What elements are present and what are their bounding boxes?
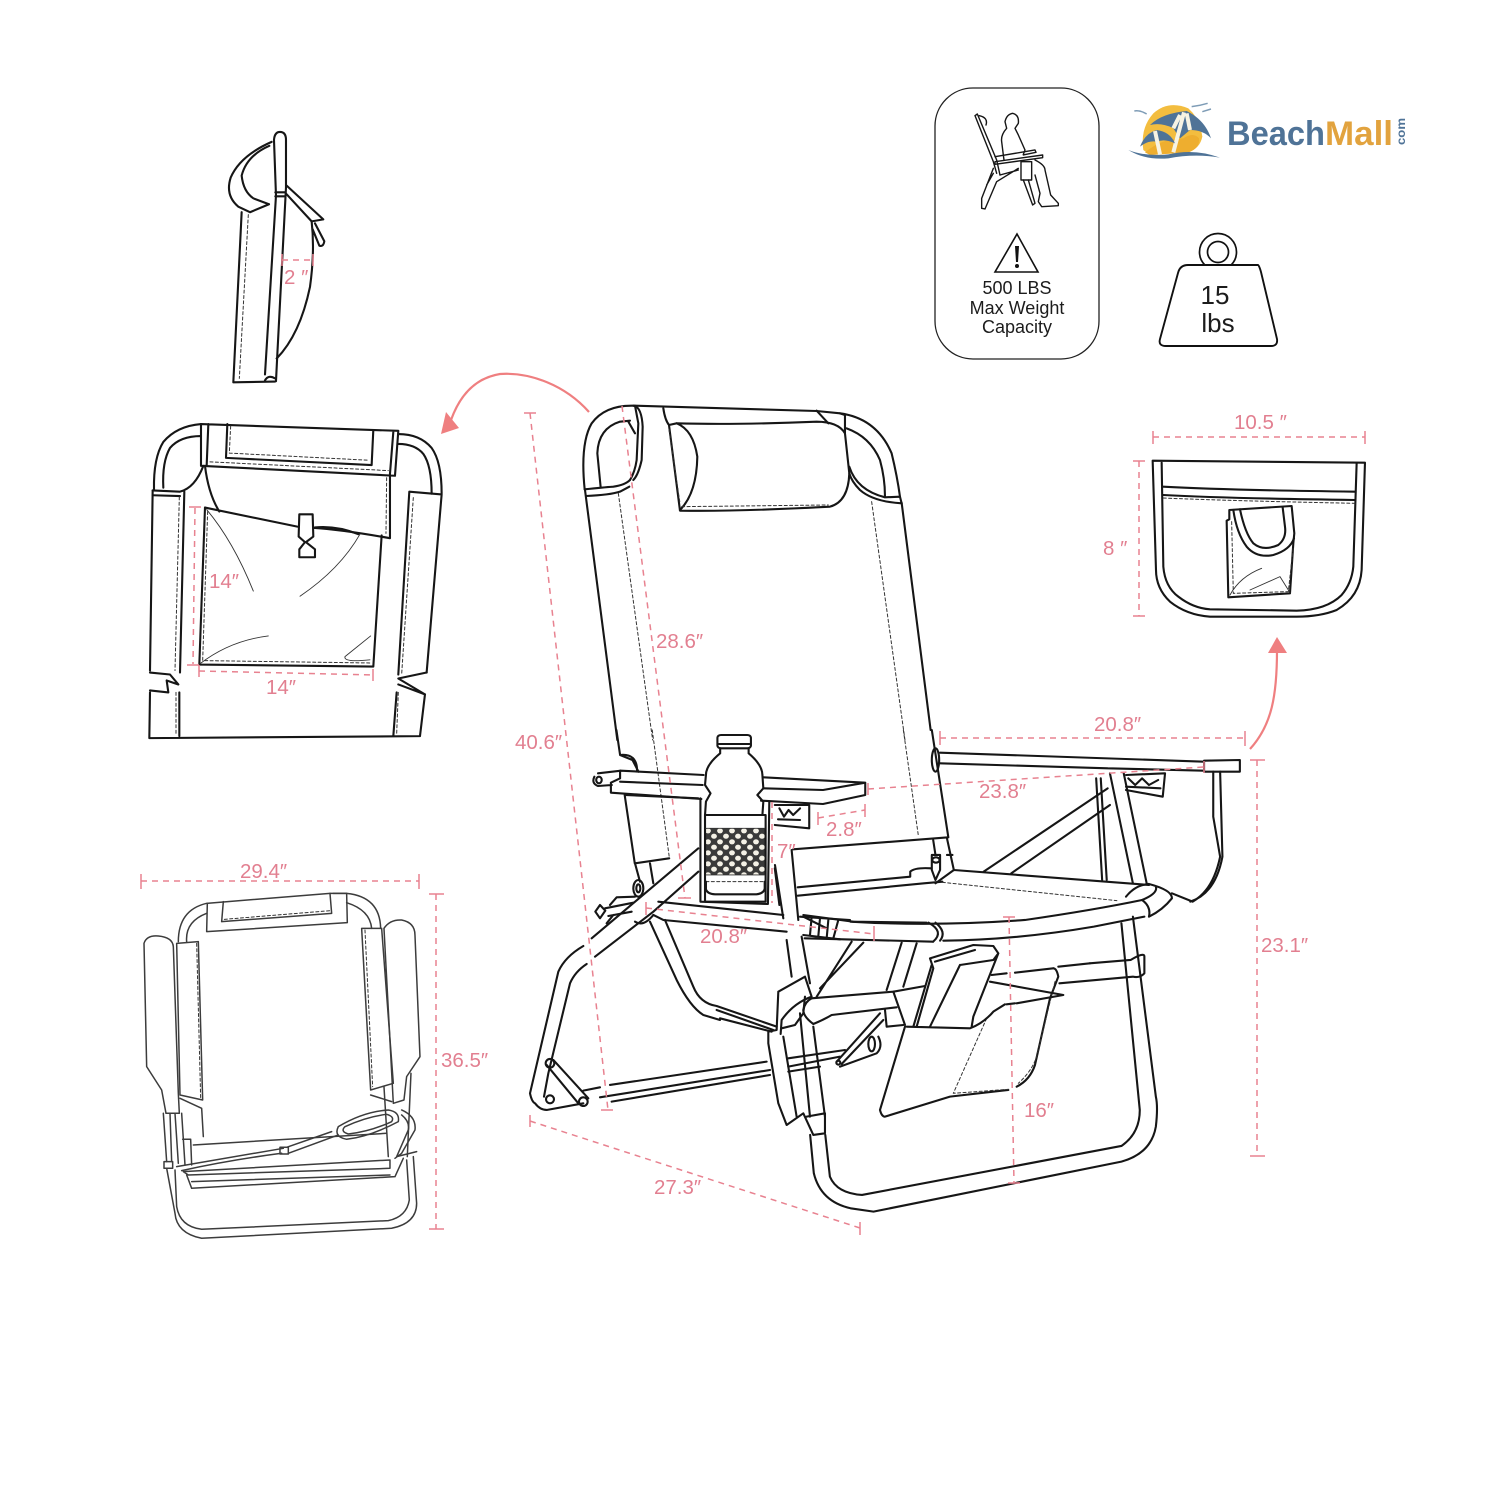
dimension 28.6 back height: 28.6″ [656,630,703,653]
arrow to side pocket view [1250,637,1287,749]
panel: max weight capacity: Capacity [982,317,1052,337]
dimension 40.6 overall height: 40.6″ [515,731,562,754]
dimension 20.8 arm length [940,713,1245,746]
main chair: backrest [583,406,931,740]
dimension 8 pocket height [1103,461,1145,616]
icon: warning triangle [995,234,1038,272]
dimension 29.4 folded width [141,860,419,889]
dimension 28.6 back height [622,406,703,898]
dimension 2.8 arm width [818,804,865,841]
dimension 2 pocket depth: 2 ″ [284,266,308,289]
logo: BeachMall: com [1394,118,1408,145]
dimension 7 holder height: 7″ [777,840,796,863]
water bottle in mesh holder [705,735,766,902]
dimension 16 seat height [1003,917,1054,1183]
dimension 20.8 seat depth: 20.8″ [700,925,747,948]
panel: max weight capacity: Max Weight [970,298,1064,318]
dimension 8 pocket height: 8 ″ [1103,537,1127,560]
icon: 15 lbs weight: lbs [1201,308,1235,338]
arrow to rear pocket view [441,374,589,434]
dimension 40.6 overall height [515,413,613,1110]
dimension 23.1 arm height: 23.1″ [1261,934,1308,957]
dimension 10.5 pocket width [1153,411,1365,444]
side view of backrest with pocket [229,132,324,382]
dimension 23.8 seat width [868,761,1204,803]
icon: seated person in chair [975,113,1058,209]
dimension 2.8 arm width: 2.8″ [826,818,862,841]
dimension 14 pocket width [199,665,373,699]
dimension 7 holder height [772,802,796,903]
dimension 2 pocket depth [282,254,313,289]
dimension 23.8 seat width: 23.8″ [979,780,1026,803]
dimension 20.8 seat depth [646,902,874,948]
icon: 15 lbs weight [1160,234,1277,346]
dimension 36.5 folded height: 36.5″ [441,1049,488,1072]
logo wordmark: Beach [1227,115,1325,153]
logo: BeachMall: Mall [1325,115,1393,153]
dimension 27.3 frame depth: 27.3″ [654,1176,701,1199]
rear view of backrest with pocket [149,424,442,738]
rear view of folded chair [144,893,420,1238]
panel: max weight capacity [935,88,1099,359]
dimension 14 pocket width: 14″ [266,676,296,699]
main chair: rear leg, lever and strut [530,848,850,1135]
dimension 29.4 folded width: 29.4″ [240,860,287,883]
icon: 15 lbs weight: 15 [1201,280,1229,310]
dimension 36.5 folded height [429,894,488,1229]
dimension 20.8 arm length: 20.8″ [1094,713,1141,736]
dimension 27.3 frame depth [530,1115,860,1235]
logo: BeachMall [1128,103,1408,159]
logo icon: sun and umbrellas [1128,103,1220,159]
main chair: arms, seat and right frame [593,730,1240,1212]
capacity text: 500 LBS [982,278,1052,298]
dimension 10.5 pocket width: 10.5 ″ [1234,411,1287,434]
right side pocket detail [1153,461,1365,617]
dimension 16 seat height: 16″ [1024,1099,1054,1122]
dimension 14 pocket height [187,507,239,665]
main chair: cross tube, supports and hanging bag [803,915,1090,1117]
dimension 14 pocket height: 14″ [209,570,239,593]
dimension 23.1 arm height [1250,760,1308,1156]
